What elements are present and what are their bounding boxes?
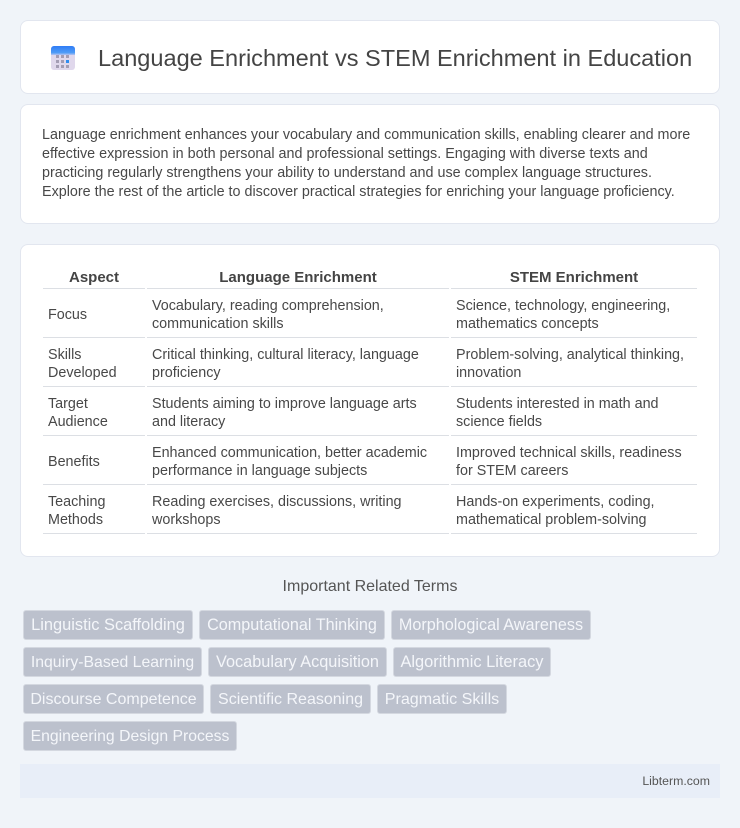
- header panel: [20, 20, 720, 94]
- row: benefits: [48, 445, 682, 479]
- row: skills developed: Skills: [48, 347, 81, 363]
- row: target audience: and literacy: [152, 414, 225, 430]
- row: benefits: performance in language subjects: [152, 463, 367, 479]
- row: target audience: Target: [48, 396, 88, 412]
- row: benefits: for STEM careers: [456, 463, 568, 479]
- row: benefits: Enhanced communication, better academic: [152, 445, 427, 461]
- row: teaching methods: workshops: [152, 512, 221, 528]
- intro text: Explore the rest of the article to discover practical strategies for enriching your language proficiency.: [42, 184, 675, 200]
- intro panel: [20, 104, 720, 224]
- tag: [208, 647, 387, 677]
- tag: Pragmatic Skills: [385, 690, 499, 708]
- row: skills developed: Developed: [48, 365, 117, 381]
- row: focus: Focus: [48, 307, 87, 323]
- intro text: practicing regularly strengthens your ability to understand and use complex language structures.: [42, 165, 652, 181]
- row: skills developed: innovation: [456, 365, 521, 381]
- row: target audience: science fields: [456, 414, 542, 430]
- row: teaching methods: Reading exercises, discussions, writing: [152, 494, 402, 510]
- row: skills developed: proficiency: [152, 365, 221, 381]
- row: teaching methods: Teaching: [48, 494, 105, 510]
- table headers: [69, 269, 638, 286]
- row: target audience: Students aiming to improve language arts: [152, 396, 417, 412]
- row: target audience: Students interested in math and: [456, 396, 659, 412]
- row: target audience: [48, 396, 659, 430]
- comparison table panel: [20, 244, 720, 557]
- tag: Linguistic Scaffolding: [31, 616, 185, 634]
- row: teaching methods: Methods: [48, 512, 103, 528]
- row: focus: Vocabulary, reading comprehension,: [152, 298, 384, 314]
- related terms heading: Important Related Terms: [283, 578, 457, 595]
- table headers: STEM Enrichment: [510, 269, 638, 286]
- tag: [23, 610, 193, 640]
- row: teaching methods: mathematical problem-solving: [456, 512, 647, 528]
- row: teaching methods: [48, 494, 655, 528]
- tag: Vocabulary Acquisition: [216, 653, 379, 671]
- tag: Discourse Competence: [30, 691, 197, 708]
- row: skills developed: Problem-solving, analytical thinking,: [456, 347, 684, 363]
- row: skills developed: Critical thinking, cultural literacy, language: [152, 347, 419, 363]
- row: focus: Science, technology, engineering,: [456, 298, 670, 314]
- tag: Algorithmic Literacy: [400, 653, 544, 671]
- tag: [393, 647, 551, 677]
- tag: [391, 610, 591, 640]
- tag: [23, 684, 204, 714]
- tag: [377, 684, 507, 714]
- row: target audience: Audience: [48, 414, 108, 430]
- tag: [210, 684, 371, 714]
- title: Language Enrichment vs STEM Enrichment in Education: [98, 45, 692, 71]
- tag: Morphological Awareness: [399, 616, 583, 634]
- row: teaching methods: Hands-on experiments, coding,: [456, 494, 655, 510]
- intro text: Language enrichment enhances your vocabulary and communication skills, enabling clearer and more: [42, 127, 690, 143]
- footer credit: Libterm.com: [642, 774, 710, 788]
- row: benefits: Benefits: [48, 454, 100, 470]
- related terms tags: [23, 610, 591, 751]
- tag: [199, 610, 385, 640]
- intro text: [42, 127, 690, 200]
- tag: Computational Thinking: [207, 616, 377, 634]
- table headers: Aspect: [69, 269, 119, 286]
- row: benefits: Improved technical skills, readiness: [456, 445, 682, 461]
- row: skills developed: [48, 347, 684, 381]
- tag: Inquiry-Based Learning: [31, 654, 194, 671]
- row: focus: communication skills: [152, 316, 284, 332]
- intro text: effective expression in both personal and professional settings. Engaging with diverse texts and: [42, 146, 648, 162]
- tag: Scientific Reasoning: [218, 691, 363, 708]
- row: focus: [48, 298, 670, 332]
- icon: calendar: [51, 46, 75, 70]
- tag: Engineering Design Process: [31, 728, 229, 745]
- footer bar: [20, 764, 720, 798]
- tag: [23, 721, 237, 751]
- table headers: Language Enrichment: [219, 269, 377, 286]
- row: focus: mathematics concepts: [456, 316, 599, 332]
- tag: [23, 647, 202, 677]
